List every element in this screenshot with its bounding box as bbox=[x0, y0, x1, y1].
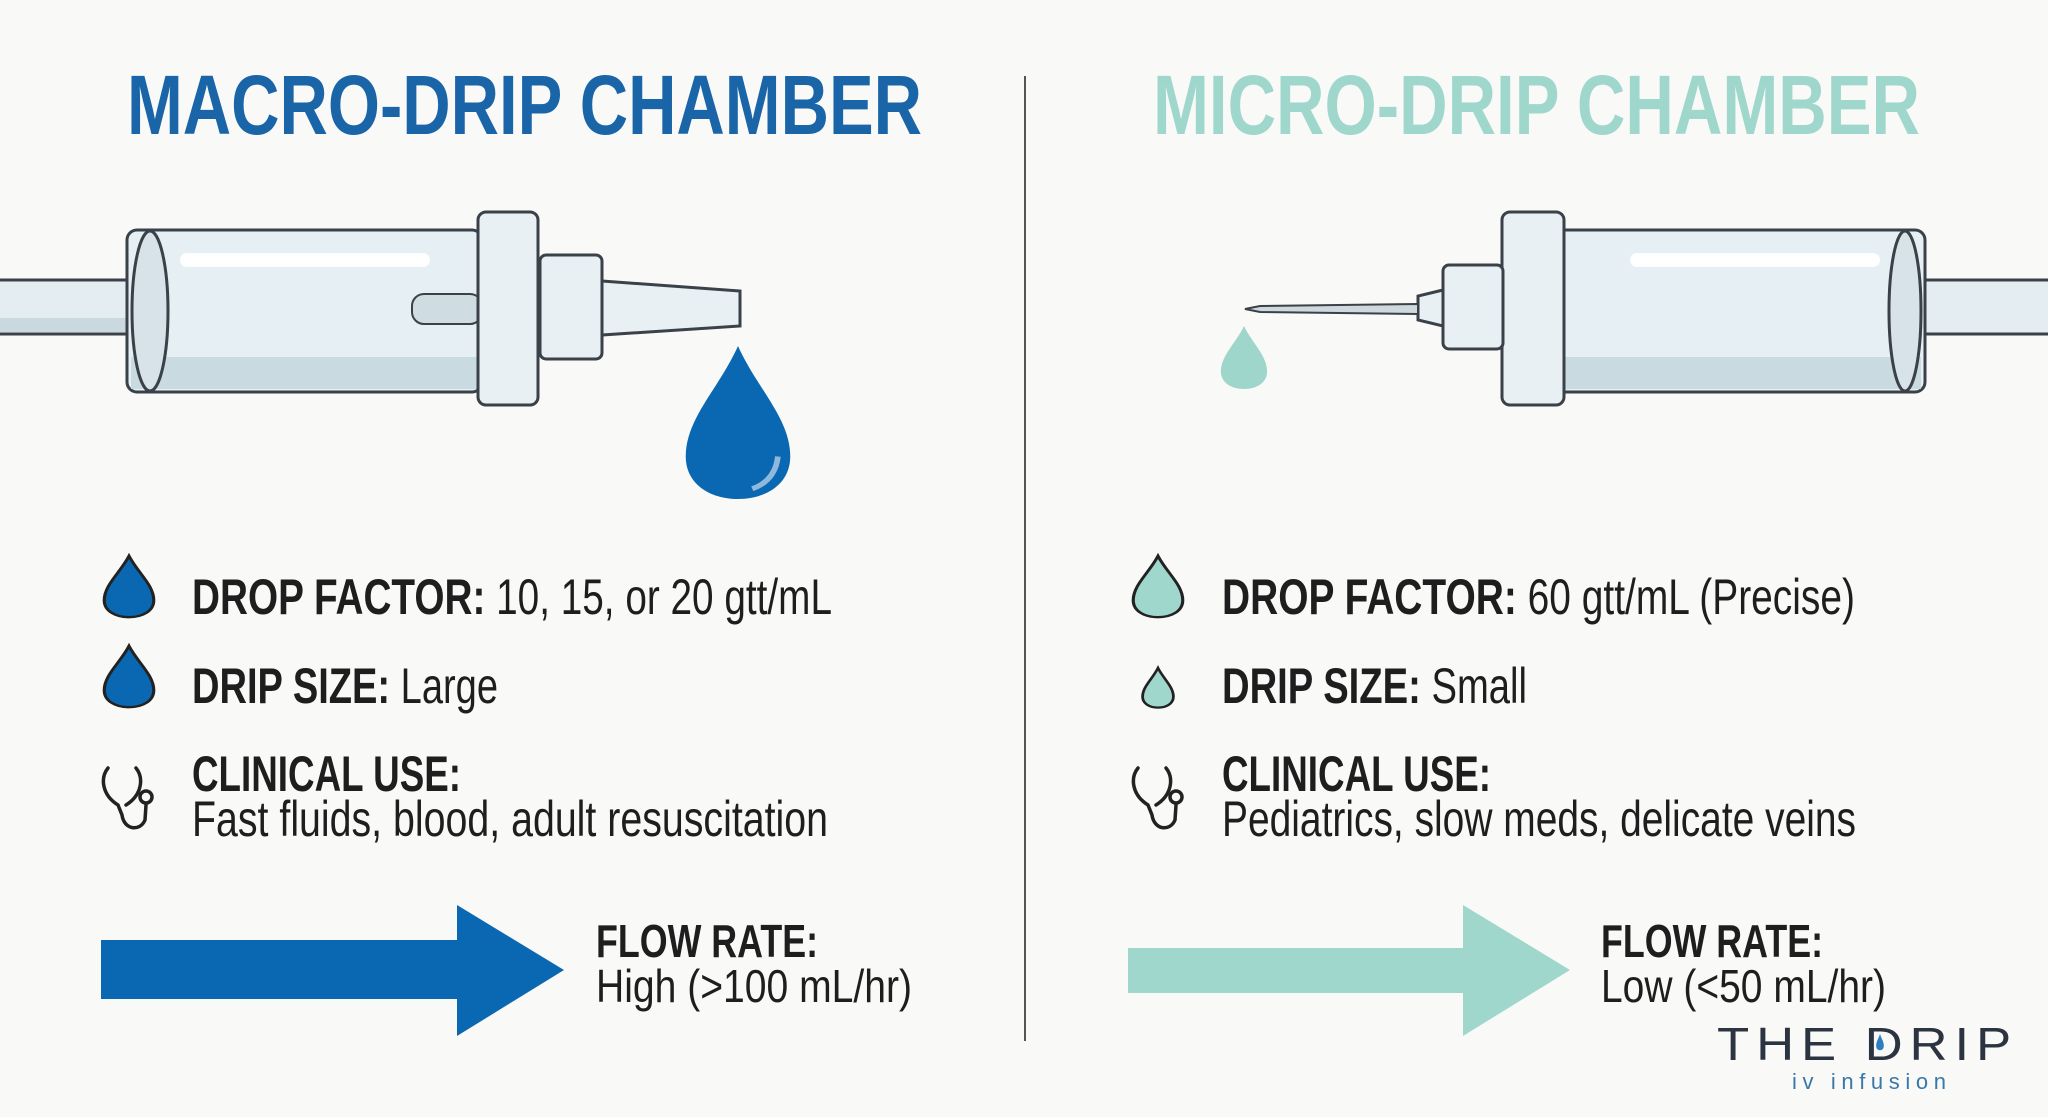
icon: drip size bbox=[104, 646, 154, 707]
panel: macro details bbox=[103, 556, 832, 847]
panel: micro details: DRIP SIZE: Small bbox=[1222, 658, 1527, 714]
divider bbox=[1024, 76, 1026, 1041]
panel: micro details bbox=[1133, 556, 1856, 847]
logo: the drip iv infusion: iv infusion bbox=[1792, 1069, 1946, 1094]
text: flow rate low bbox=[1601, 915, 1886, 1012]
text: flow rate high: High (>100 mL/hr) bbox=[596, 960, 912, 1012]
text: flow rate high: FLOW RATE: bbox=[596, 915, 818, 967]
arrow: low flow bbox=[1128, 905, 1570, 1036]
panel: macro details: Fast fluids, blood, adult resuscitation bbox=[192, 791, 828, 847]
icon: drop factor teal bbox=[1133, 556, 1183, 617]
logo: the drip iv infusion bbox=[1717, 1018, 2018, 1094]
panel: micro details: Pediatrics, slow meds, delicate veins bbox=[1222, 791, 1856, 847]
logo: the drip iv infusion: THE DRIP bbox=[1717, 1018, 2018, 1070]
title: macro-drip chamber: MACRO-DRIP CHAMBER bbox=[127, 58, 922, 152]
icon: large blue drop bbox=[686, 346, 790, 499]
text: flow rate low: FLOW RATE: bbox=[1601, 915, 1823, 967]
panel: micro details: CLINICAL USE: bbox=[1222, 746, 1491, 802]
icon: drop factor bbox=[104, 556, 154, 617]
panel: macro details: DROP FACTOR: 10, 15, or 20 gtt/mL bbox=[192, 569, 832, 625]
illustration: micro drip chamber syringe bbox=[1245, 212, 2048, 405]
text: flow rate high bbox=[596, 915, 912, 1012]
text: flow rate low: Low (<50 mL/hr) bbox=[1601, 960, 1886, 1012]
icon: stethoscope bbox=[1133, 768, 1182, 828]
icon: stethoscope bbox=[103, 768, 152, 828]
arrow: high flow bbox=[101, 905, 564, 1036]
panel: macro details: DRIP SIZE: Large bbox=[192, 658, 498, 714]
icon: small teal drop bbox=[1221, 326, 1267, 389]
panel: micro details: DROP FACTOR: 60 gtt/mL (Precise) bbox=[1222, 569, 1855, 625]
illustration: macro drip chamber syringe bbox=[0, 212, 740, 405]
icon: small drip bbox=[1143, 668, 1173, 708]
panel: macro details: CLINICAL USE: bbox=[192, 746, 461, 802]
